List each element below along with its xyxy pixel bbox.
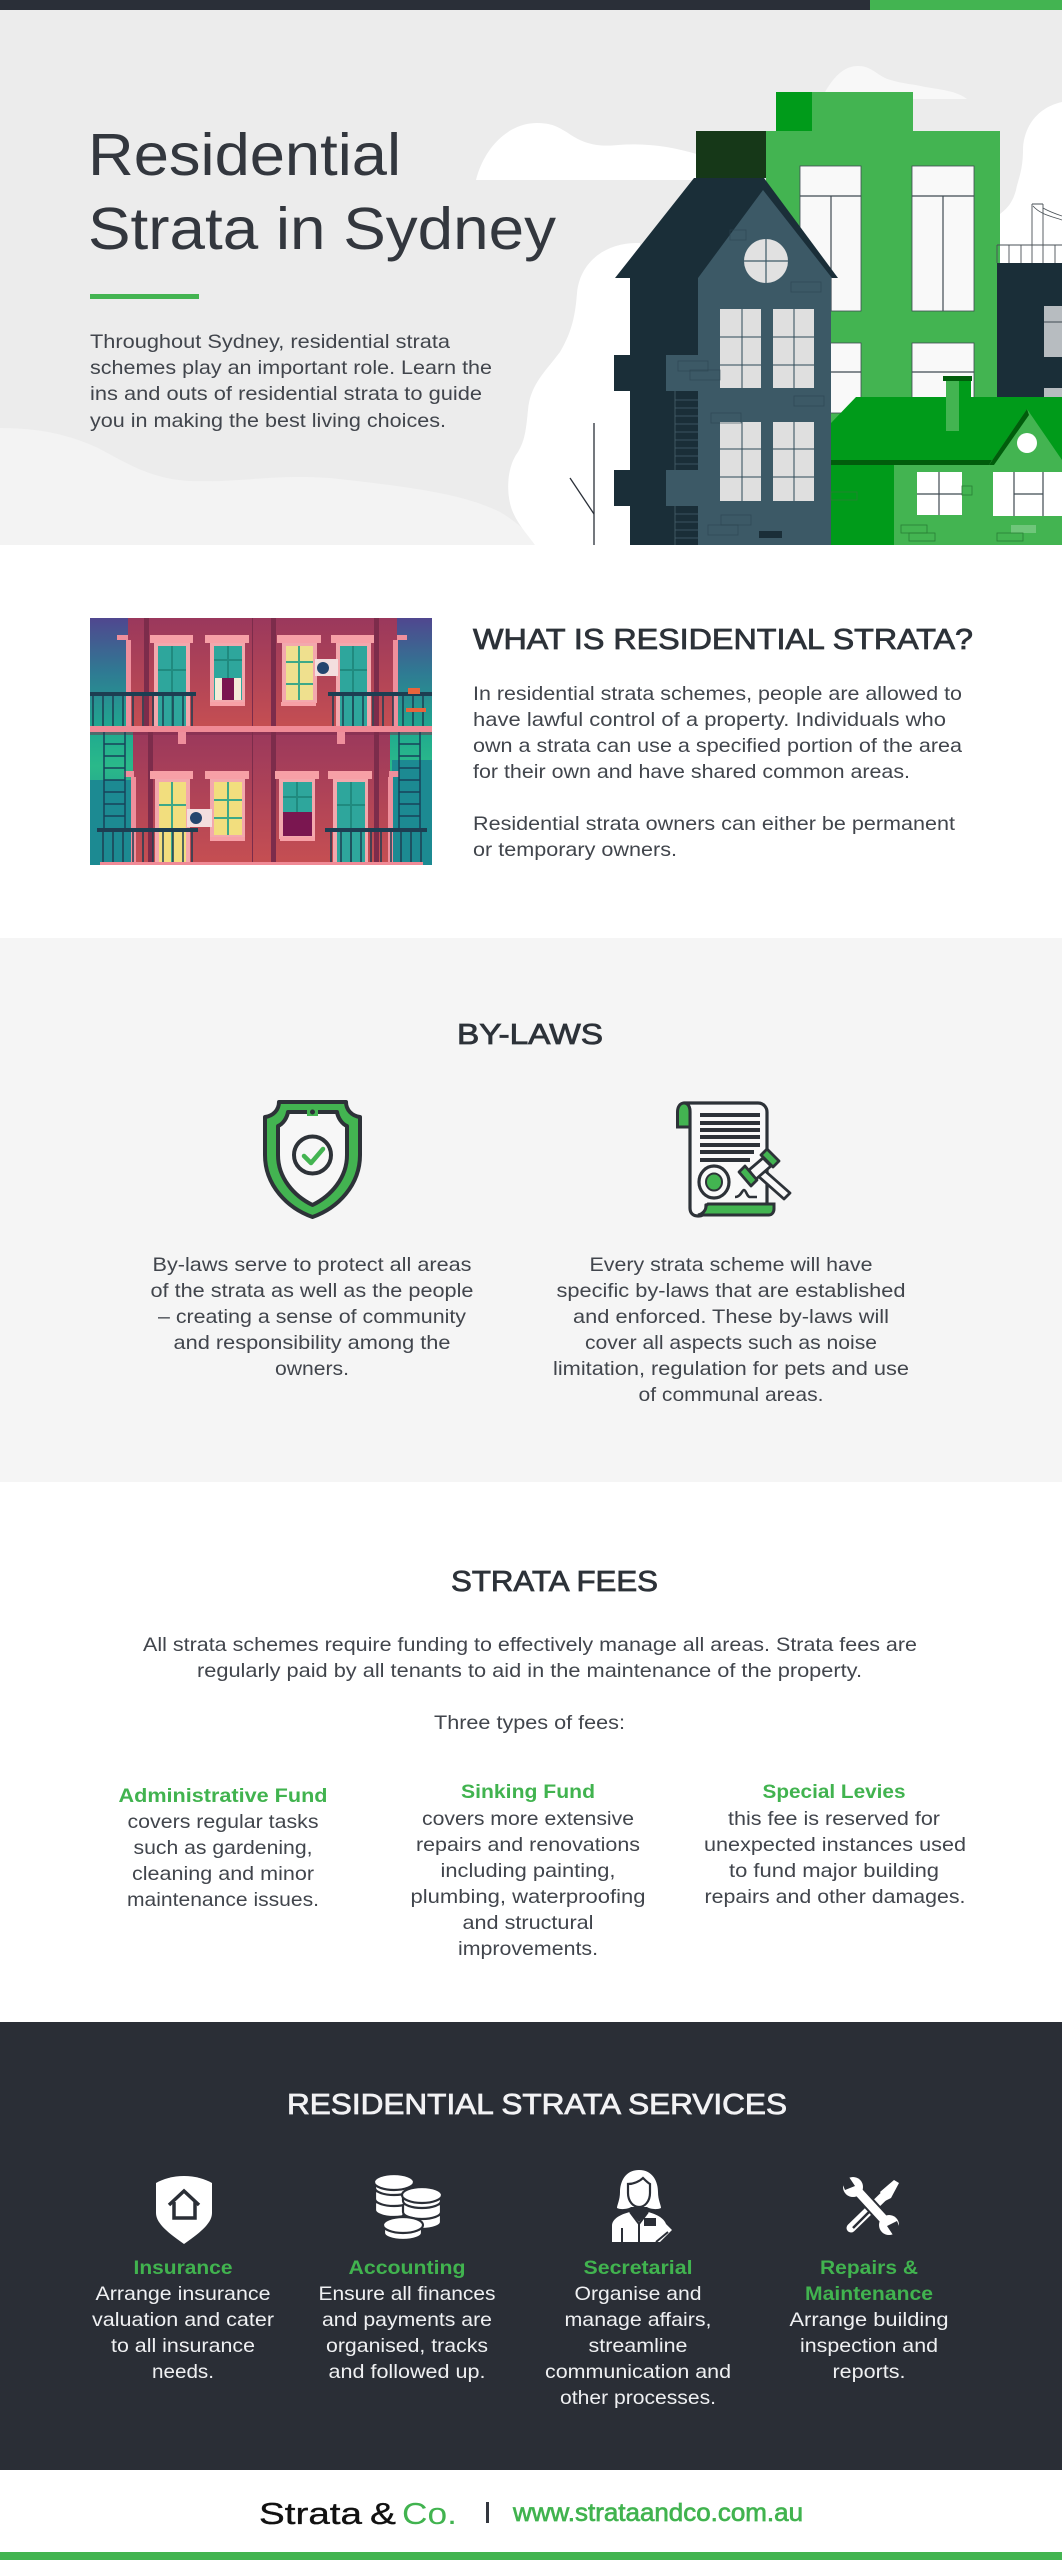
logo: Co. bbox=[402, 2496, 457, 2531]
intro text: ins and outs of residential strata to guide bbox=[90, 383, 482, 405]
icon: secretary with phone bbox=[612, 2170, 672, 2242]
intro text: schemes play an important role. Learn the bbox=[90, 357, 492, 379]
top colour bar bbox=[0, 0, 1062, 10]
service: accounting: and followed up. bbox=[328, 2361, 486, 2383]
service: accounting: Accounting bbox=[348, 2257, 466, 2279]
fee: administrative fund: Administrative Fund bbox=[118, 1785, 328, 1807]
separator bbox=[486, 2502, 489, 2523]
panel: footer bbox=[0, 2470, 1062, 2552]
icon: insurance shield with house bbox=[156, 2176, 212, 2244]
logo: & bbox=[370, 2496, 396, 2531]
fee: sinking fund: including painting, bbox=[440, 1860, 616, 1882]
fee: administrative fund: cleaning and minor bbox=[132, 1863, 315, 1885]
text: by-laws purpose: and responsibility among the bbox=[174, 1332, 450, 1354]
text: by-laws scope: Every strata scheme will have bbox=[590, 1254, 872, 1276]
fire escape ladders bbox=[104, 732, 420, 828]
text: by-laws scope: of communal areas. bbox=[638, 1384, 824, 1406]
fee: administrative fund: covers regular tasks bbox=[128, 1811, 319, 1833]
service: insurance: to all insurance bbox=[111, 2335, 255, 2357]
intro text: Throughout Sydney, residential strata bbox=[90, 331, 450, 353]
illustration: apartment building at night bbox=[90, 618, 432, 865]
text: by-laws purpose: owners. bbox=[275, 1358, 349, 1380]
service: repairs and maintenance: Maintenance bbox=[805, 2283, 933, 2305]
lower floor windows bbox=[150, 771, 372, 863]
logo bbox=[259, 2496, 457, 2531]
service: secretarial: Secretarial bbox=[584, 2257, 692, 2279]
text: by-laws purpose: – creating a sense of community bbox=[158, 1306, 466, 1328]
service: insurance: valuation and cater bbox=[92, 2309, 275, 2331]
text: by-laws scope: cover all aspects such as noise bbox=[585, 1332, 877, 1354]
icon: coin stacks bbox=[374, 2174, 442, 2240]
icon: legal document with gavel bbox=[678, 1103, 790, 1216]
title accent rule bbox=[90, 294, 199, 299]
text: by-laws purpose bbox=[150, 1254, 474, 1380]
service: repairs and maintenance bbox=[790, 2257, 948, 2383]
intro text bbox=[90, 331, 492, 432]
service: insurance: needs. bbox=[152, 2361, 214, 2383]
intro text: Three types of fees: bbox=[434, 1712, 625, 1734]
fee: special levies bbox=[704, 1781, 966, 1908]
heading: WHAT IS RESIDENTIAL STRATA? bbox=[473, 624, 973, 656]
icon: shield with check bbox=[265, 1102, 360, 1217]
panel: by-laws bbox=[0, 938, 1062, 1482]
title: Strata in Sydney bbox=[88, 196, 557, 262]
balcony floor and railings bbox=[90, 688, 432, 744]
text: by-laws scope: limitation, regulation for pets and use bbox=[553, 1358, 909, 1380]
illustration: slate gabled house bbox=[614, 178, 838, 545]
fee: sinking fund: improvements. bbox=[458, 1938, 598, 1960]
fee: sinking fund bbox=[410, 1781, 646, 1960]
title: Residential bbox=[88, 122, 401, 188]
fee: special levies: this fee is reserved for bbox=[728, 1808, 941, 1830]
service: accounting: organised, tracks bbox=[326, 2335, 488, 2357]
text: by-laws scope: and enforced. These by-laws will bbox=[573, 1306, 889, 1328]
intro text bbox=[143, 1634, 917, 1734]
body text: own a strata can use a specified portion of the area bbox=[473, 735, 962, 757]
fee: sinking fund: covers more extensive bbox=[422, 1808, 634, 1830]
title bbox=[88, 122, 557, 262]
service: secretarial: streamline bbox=[588, 2335, 688, 2357]
body text bbox=[473, 683, 962, 861]
intro text: All strata schemes require funding to effectively manage all areas. Strata fees are bbox=[143, 1634, 917, 1656]
website url: www.strataandco.com.au bbox=[512, 2499, 803, 2527]
body text: In residential strata schemes, people are allowed to bbox=[473, 683, 962, 705]
illustration: green tower block bbox=[696, 92, 1000, 431]
fee: special levies: unexpected instances used bbox=[704, 1834, 966, 1856]
service: secretarial: Organise and bbox=[574, 2283, 702, 2305]
panel: residential strata services bbox=[0, 2022, 1062, 2470]
heading: STRATA FEES bbox=[451, 1566, 658, 1598]
service: secretarial: other processes. bbox=[560, 2387, 716, 2409]
service: secretarial: communication and bbox=[545, 2361, 731, 2383]
body text: or temporary owners. bbox=[473, 839, 677, 861]
fee: sinking fund: plumbing, waterproofing bbox=[410, 1886, 646, 1908]
top floor windows bbox=[150, 635, 374, 727]
text: by-laws purpose: of the strata as well as the people bbox=[150, 1280, 474, 1302]
service: repairs and maintenance: Repairs & bbox=[820, 2257, 918, 2279]
intro text: you in making the best living choices. bbox=[90, 410, 446, 432]
text: by-laws purpose: By-laws serve to protect all areas bbox=[152, 1254, 472, 1276]
body text: for their own and have shared common areas. bbox=[473, 761, 910, 783]
service: insurance bbox=[92, 2257, 275, 2383]
panel: what is residential strata bbox=[90, 618, 972, 865]
service: repairs and maintenance: Arrange building bbox=[790, 2309, 948, 2331]
service: accounting bbox=[318, 2257, 496, 2383]
illustration: green cottage bbox=[831, 376, 1062, 545]
text: by-laws scope bbox=[553, 1254, 909, 1406]
service: accounting: and payments are bbox=[322, 2309, 492, 2331]
service: insurance: Insurance bbox=[134, 2257, 233, 2279]
panel: strata fees bbox=[0, 1482, 1062, 2022]
lower balconies bbox=[97, 828, 427, 865]
panel: hero bbox=[0, 10, 1062, 545]
service: accounting: Ensure all finances bbox=[318, 2283, 496, 2305]
body text: Residential strata owners can either be permanent bbox=[473, 813, 956, 835]
fee: sinking fund: and structural bbox=[462, 1912, 594, 1934]
body text: have lawful control of a property. Individuals who bbox=[473, 709, 946, 731]
fee: sinking fund: Sinking Fund bbox=[461, 1781, 595, 1803]
service: secretarial bbox=[545, 2257, 731, 2409]
fee: special levies: repairs and other damages. bbox=[704, 1886, 966, 1908]
text: by-laws scope: specific by-laws that are established bbox=[556, 1280, 906, 1302]
hero background clouds bbox=[476, 66, 1062, 545]
service: insurance: Arrange insurance bbox=[96, 2283, 270, 2305]
intro text: regularly paid by all tenants to aid in the maintenance of the property. bbox=[197, 1660, 862, 1682]
fee: sinking fund: repairs and renovations bbox=[416, 1834, 640, 1856]
fee: administrative fund: maintenance issues. bbox=[127, 1889, 319, 1911]
icon: bare tree bbox=[570, 423, 594, 545]
fee: special levies: Special Levies bbox=[762, 1781, 906, 1803]
fee: administrative fund: such as gardening, bbox=[134, 1837, 312, 1859]
heading: RESIDENTIAL STRATA SERVICES bbox=[287, 2089, 787, 2121]
illustration: dark building at right bbox=[997, 204, 1062, 399]
service: repairs and maintenance: inspection and bbox=[800, 2335, 938, 2357]
bottom colour bar bbox=[0, 2552, 1062, 2560]
service: secretarial: manage affairs, bbox=[564, 2309, 712, 2331]
heading: BY-LAWS bbox=[457, 1019, 603, 1051]
service: repairs and maintenance: reports. bbox=[832, 2361, 906, 2383]
logo: Strata bbox=[259, 2496, 363, 2531]
fee: administrative fund bbox=[118, 1785, 328, 1911]
icon: crossed wrench and screwdriver bbox=[840, 2177, 902, 2235]
fee: special levies: to fund major building bbox=[729, 1860, 939, 1882]
